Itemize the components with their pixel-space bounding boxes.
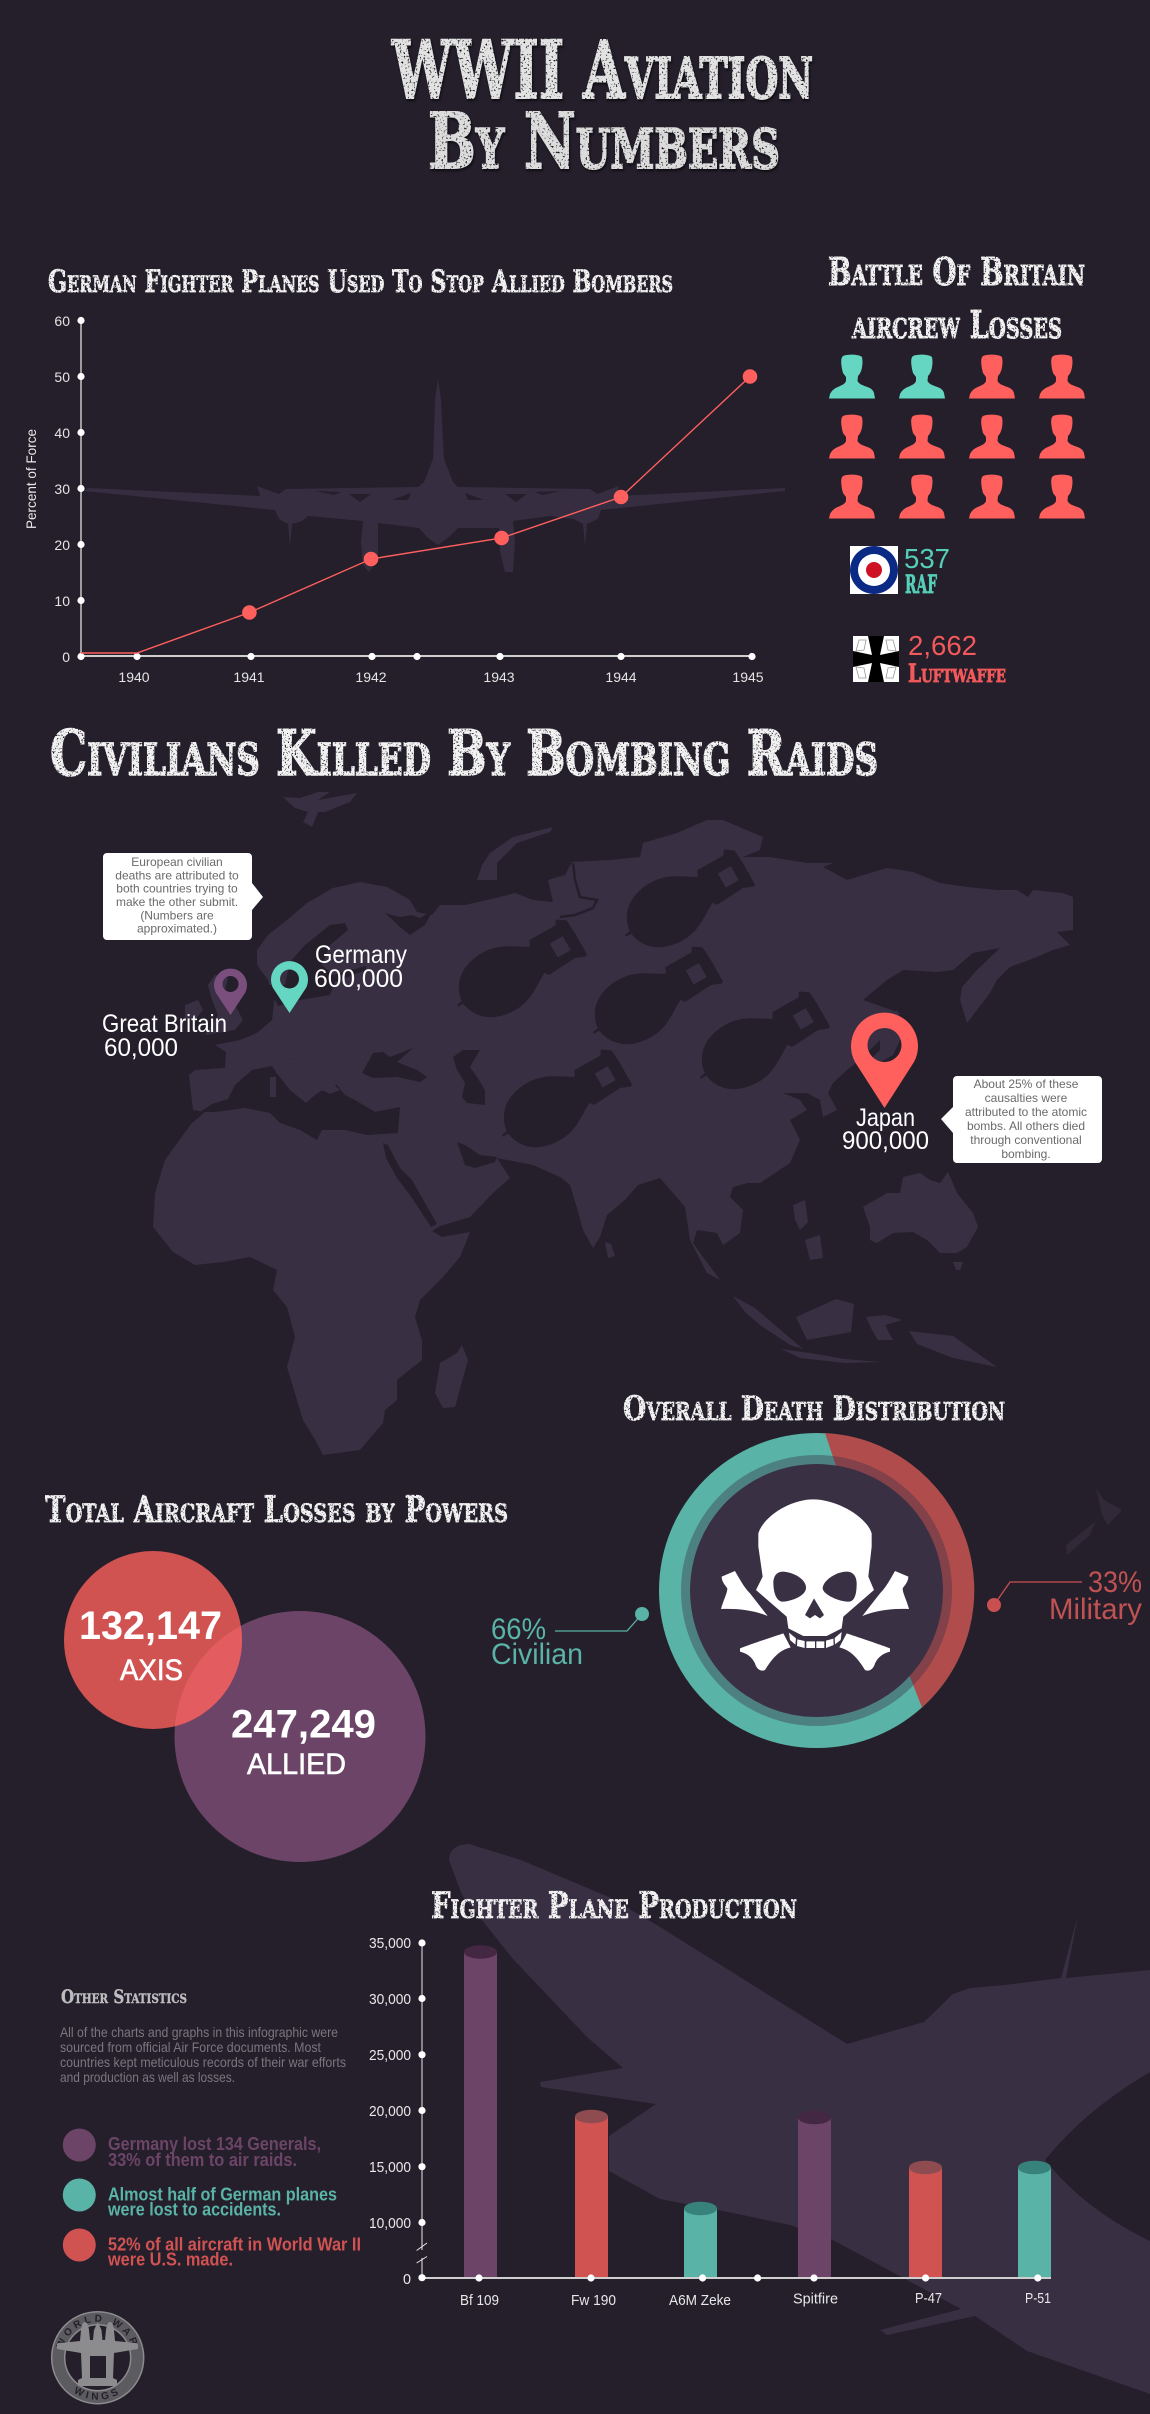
stat: US made — [63, 2228, 361, 2270]
y tick dots and labels: 20 — [54, 537, 70, 553]
stat: Luftwaffe losses: Luftwaffe — [908, 659, 1006, 688]
y axis labels: 25,000 — [369, 2047, 411, 2064]
heading: overall death distribution: Overall Death Distribution — [623, 1389, 1005, 1429]
pin: Germany — [271, 961, 308, 1013]
x axis labels: P-51 — [1025, 2290, 1051, 2307]
stat: generals: Germany lost 134 Generals, — [108, 2134, 321, 2154]
icon: Luftwaffe cross — [853, 636, 899, 682]
text: allied: 247,249 — [231, 1702, 376, 1746]
y tick dots and labels: 50 — [54, 369, 70, 385]
stat: accidents: were lost to accidents. — [107, 2200, 281, 2220]
data points — [242, 369, 757, 620]
text: axis: 132,147 — [79, 1604, 222, 1648]
label: Great Britain — [102, 1010, 227, 1062]
circle: axis — [64, 1551, 242, 1729]
x tick dots and year labels: 1940 — [118, 669, 150, 685]
centre disc — [686, 1460, 948, 1722]
x axis labels: Bf 109 — [460, 2292, 499, 2309]
donut chart with skull — [659, 1433, 974, 1748]
label: Great Britain: 60,000 — [104, 1034, 178, 1062]
data line — [81, 376, 750, 653]
text: axis: AXIS — [120, 1654, 183, 1687]
y tick dots and labels: 30 — [54, 481, 70, 497]
pictogram: aircrew icons — [829, 355, 1085, 518]
heading: German fighter planes: German Fighter Planes Used To Stop Allied Bombers — [48, 264, 673, 300]
callout: Japan note: causalties were — [985, 1091, 1068, 1105]
stat: accidents — [63, 2178, 337, 2220]
pin: Great Britain — [214, 969, 247, 1015]
callout: European deaths: deaths are attributed to — [115, 868, 239, 882]
y tick dots and labels — [54, 313, 85, 665]
callout: Japan note: through conventional — [970, 1133, 1082, 1147]
text: axis — [79, 1604, 222, 1687]
x tick dots and year labels: 1941 — [233, 669, 265, 685]
x axis labels: A6M Zeke — [669, 2292, 731, 2309]
y axis labels: 35,000 — [369, 1935, 411, 1952]
line chart: percent of force — [23, 313, 764, 685]
label: Japan: 900,000 — [842, 1127, 929, 1155]
y tick dots and labels: 40 — [54, 425, 70, 441]
icon: RAF roundel — [850, 546, 898, 594]
leader: 66% civilian: 66% — [491, 1613, 546, 1646]
label: Japan — [842, 1104, 929, 1155]
leader: 33% military — [987, 1566, 1142, 1626]
label: Germany: 600,000 — [314, 965, 403, 993]
x tick dots and year labels: 1944 — [605, 669, 637, 685]
axes with break — [417, 1943, 1051, 2278]
label: Japan: Japan — [856, 1104, 915, 1132]
y axis labels: 10,000 — [369, 2215, 411, 2232]
x axis labels: Fw 190 — [571, 2292, 616, 2309]
heading: civilians killed: Civilians Killed By Bombing Raids — [50, 716, 878, 790]
callout: European deaths: (Numbers are — [140, 908, 214, 922]
text: sources paragraph: countries kept meticulous records of their war efforts — [60, 2054, 346, 2070]
bar: P-51 — [1018, 2161, 1051, 2277]
bombs over map — [441, 839, 836, 1164]
logo: World War Wings badge — [50, 2311, 144, 2404]
y axis labels: 0 — [403, 2271, 411, 2288]
x tick dots and year labels: 1945 — [732, 669, 764, 685]
callout: European deaths: both countries trying to — [116, 882, 238, 896]
x tick dots and year labels — [118, 653, 764, 685]
leader: 33% military: 33% — [1088, 1566, 1142, 1599]
pin: Japan — [851, 1013, 918, 1108]
bar: Fw 190 — [575, 2110, 608, 2277]
y axis labels: 30,000 — [369, 1991, 411, 2008]
y tick dots and labels: 10 — [54, 593, 70, 609]
logo: World War Wings badge: WORLD WAR — [56, 2314, 137, 2346]
world map — [153, 792, 1122, 1555]
x axis labels: P-47 — [915, 2290, 942, 2307]
text: allied: ALLIED — [247, 1748, 346, 1781]
callout: Japan note: bombs. All others died — [967, 1119, 1085, 1133]
y tick dots and labels: 0 — [62, 649, 70, 665]
stat: RAF losses — [904, 543, 950, 599]
label: Great Britain: Great Britain — [102, 1010, 227, 1038]
overlap — [175, 1626, 242, 1726]
x axis labels — [460, 2290, 1051, 2309]
bar: P-47 — [909, 2161, 942, 2277]
title: WWII Aviation — [391, 23, 813, 117]
label: Germany: Germany — [315, 941, 407, 969]
title: By Numbers — [428, 97, 780, 187]
x tick dots and year labels: 1943 — [483, 669, 515, 685]
donut: military segment — [825, 1433, 974, 1708]
fighter plane silhouette — [449, 1844, 1150, 2394]
heading: total aircraft losses: Total Aircraft Losses by Powers — [45, 1489, 508, 1531]
heading: Battle of Britain aircrew losses — [828, 249, 1085, 347]
y axis labels: 15,000 — [369, 2159, 411, 2176]
x axis labels: Spitfire — [793, 2290, 838, 2308]
bar: Bf 109 — [464, 1945, 497, 2277]
callout: Japan note: About 25% of these — [974, 1077, 1079, 1091]
donut: civilian segment — [659, 1433, 974, 1748]
stat: Luftwaffe losses: 2,662 — [908, 630, 977, 661]
y axis label: Percent of Force — [23, 429, 39, 529]
bar chart: fighter production — [369, 1935, 1051, 2309]
stat: RAF losses: 537 — [904, 543, 950, 574]
circle: allied — [174, 1611, 426, 1862]
stat: RAF losses: RAF — [905, 570, 937, 599]
text: sources paragraph: sourced from official Air Force documents. Most — [60, 2039, 321, 2055]
y axis labels — [369, 1935, 411, 2288]
stat: US made: were U.S. made. — [107, 2250, 233, 2270]
label: Germany — [314, 941, 407, 993]
icon: skull and crossbones — [721, 1499, 909, 1671]
heading: Battle of Britain aircrew losses: aircrew Losses — [851, 302, 1062, 347]
heading: fighter plane production: Fighter Plane Production — [431, 1885, 797, 1927]
text: sources paragraph: and production as well as losses. — [60, 2069, 235, 2085]
callout: European deaths — [103, 853, 263, 940]
callout: Japan note: bombing. — [1001, 1147, 1051, 1161]
axis dots — [418, 1939, 1041, 2282]
stat: US made: 52% of all aircraft in World War II — [108, 2235, 361, 2255]
y tick dots and labels: 60 — [54, 313, 70, 329]
callout: Japan note — [941, 1076, 1102, 1163]
heading: other statistics: Other Statistics — [61, 1986, 187, 2008]
venn: aircraft losses — [64, 1551, 426, 1862]
bar: A6M Zeke — [684, 2202, 717, 2277]
text: allied — [231, 1702, 376, 1781]
text: sources paragraph — [60, 2024, 346, 2085]
stat: generals: 33% of them to air raids. — [108, 2150, 297, 2170]
bomber plane silhouette — [84, 379, 785, 572]
leader: 33% military: Military — [1049, 1593, 1142, 1626]
x tick dots and year labels: 1942 — [355, 669, 387, 685]
callout: European deaths: European civilian — [131, 855, 223, 869]
text: sources paragraph: All of the charts and graphs in this infographic were — [60, 2024, 338, 2040]
stat: generals — [63, 2128, 321, 2170]
axes — [81, 320, 752, 656]
title — [391, 23, 813, 187]
callout: European deaths: make the other submit. — [116, 895, 238, 909]
bar: Spitfire — [798, 2111, 831, 2277]
leader: 66% civilian: Civilian — [491, 1638, 583, 1671]
leader: 66% civilian — [491, 1607, 649, 1671]
callout: European deaths: approximated.) — [137, 922, 217, 936]
stat: Luftwaffe losses — [908, 630, 1006, 688]
callout: Japan note: attributed to the atomic — [965, 1105, 1087, 1119]
logo: World War Wings badge: WINGS — [75, 2386, 118, 2400]
stat: accidents: Almost half of German planes — [108, 2185, 337, 2205]
y axis labels: 20,000 — [369, 2103, 411, 2120]
